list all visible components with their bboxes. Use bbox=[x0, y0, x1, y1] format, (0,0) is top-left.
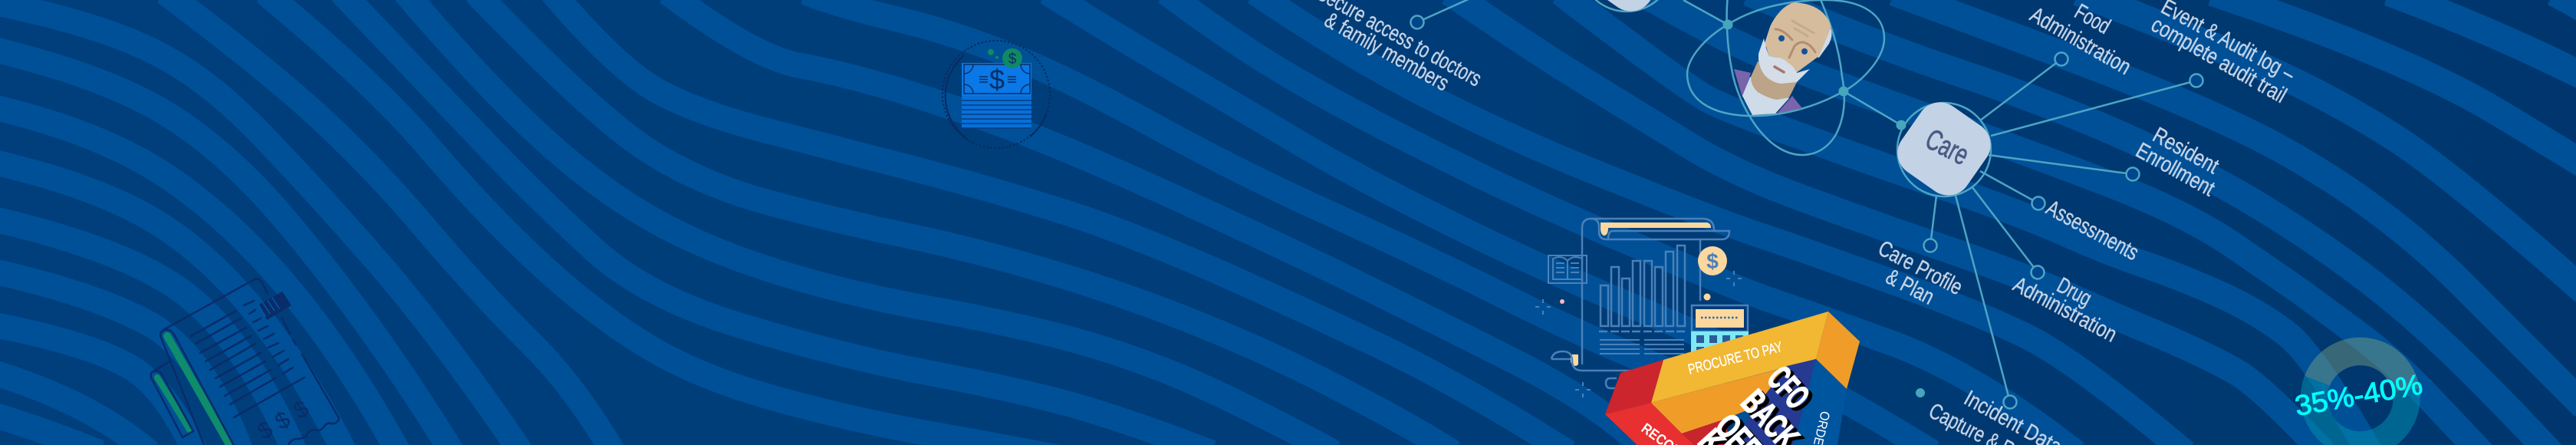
labels: care modules bbox=[1313, 0, 2299, 445]
label: complete audit trail: complete audit trail bbox=[2147, 12, 2291, 108]
network lines and rings bbox=[1417, 0, 2196, 402]
icon: money stack: $ bbox=[1008, 51, 1017, 68]
label: care profile: Care Profile bbox=[1874, 236, 1966, 300]
icon: receipt: $ bbox=[253, 417, 277, 445]
donut chart: 35%-40% bbox=[2292, 338, 2425, 445]
box title bbox=[1696, 367, 1808, 445]
network junction dots bbox=[1722, 20, 1925, 397]
icon: money stack bbox=[943, 41, 1050, 148]
donut chart: 35%-40%: 35%-40% bbox=[2292, 368, 2425, 422]
card: cropped top tile bbox=[1607, 0, 1650, 12]
box title shadow: CFO bbox=[1764, 361, 1821, 420]
icon: financial report scroll: $ bbox=[1706, 249, 1719, 273]
portrait: elderly resident bbox=[1734, 2, 1831, 115]
icon: receipt: $ bbox=[271, 407, 294, 435]
label: administration: Administration bbox=[2026, 2, 2135, 80]
card: Care bbox=[1897, 102, 1991, 196]
3D box: CFO back office KPIs bbox=[1605, 312, 1860, 445]
icon: receipt bbox=[151, 279, 339, 445]
box title shadow bbox=[1703, 370, 1813, 445]
label: drug: Drug bbox=[2053, 273, 2095, 312]
label: family members: & family members bbox=[1321, 8, 1453, 96]
card: Care: Care bbox=[1920, 124, 1974, 172]
icon: receipt: $ bbox=[289, 396, 313, 424]
icon: money stack: $ bbox=[989, 64, 1005, 95]
box title: CFO bbox=[1760, 358, 1818, 417]
top node: secure access ring bbox=[1411, 15, 1423, 29]
label: food: Food bbox=[2071, 0, 2114, 39]
box label: procure to pay: PROCURE TO PAY bbox=[1686, 339, 1785, 378]
label: enrollment: Enrollment bbox=[2132, 138, 2219, 201]
icon: financial report scroll bbox=[1535, 219, 1749, 397]
label: drug administration: Administration bbox=[2009, 272, 2120, 348]
label: assessments: Assessments bbox=[2042, 196, 2143, 265]
label: and plan: & Plan bbox=[1882, 265, 1938, 310]
box faces bbox=[1605, 312, 1860, 445]
outcome rings bbox=[1923, 52, 2203, 408]
label: resident: Resident bbox=[2149, 123, 2222, 179]
